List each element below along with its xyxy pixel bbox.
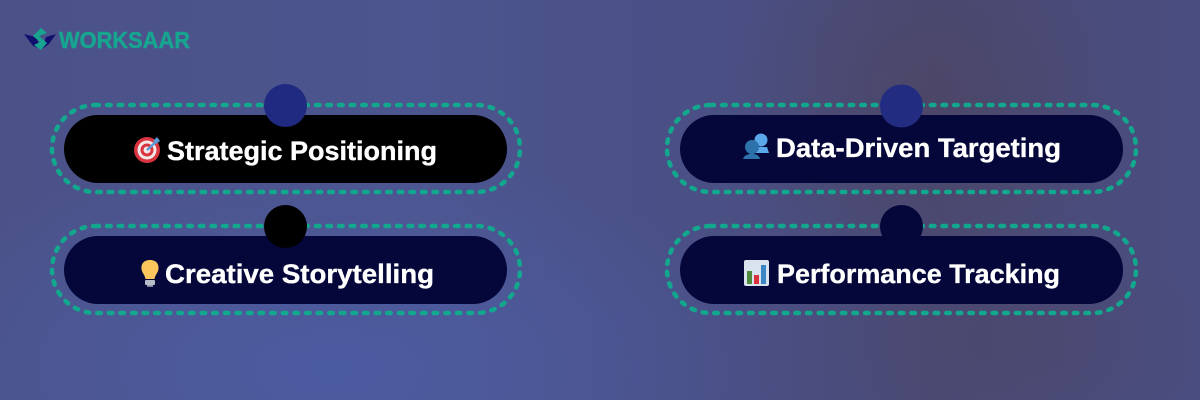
panel: Strategic Positioning: [52, 84, 520, 192]
panel: Creative Storytelling: [52, 205, 520, 313]
heading: Creative Storytelling: [165, 259, 434, 289]
logo wordmark: WORKSAAR: [59, 27, 190, 53]
icon: bar chart: [744, 260, 769, 286]
logo: WORKSAAR: [24, 27, 190, 53]
heading: Strategic Positioning: [167, 136, 437, 166]
heading: Data-Driven Targeting: [776, 133, 1061, 163]
icon: target with dart: [134, 137, 160, 163]
icon: light bulb: [141, 260, 159, 287]
heading: Performance Tracking: [777, 259, 1060, 289]
panel: Data-Driven Targeting: [667, 84, 1136, 192]
panel: Performance Tracking: [667, 205, 1136, 313]
icon: logo wings and S mark: [24, 28, 56, 50]
icon: two people: [743, 134, 769, 159]
